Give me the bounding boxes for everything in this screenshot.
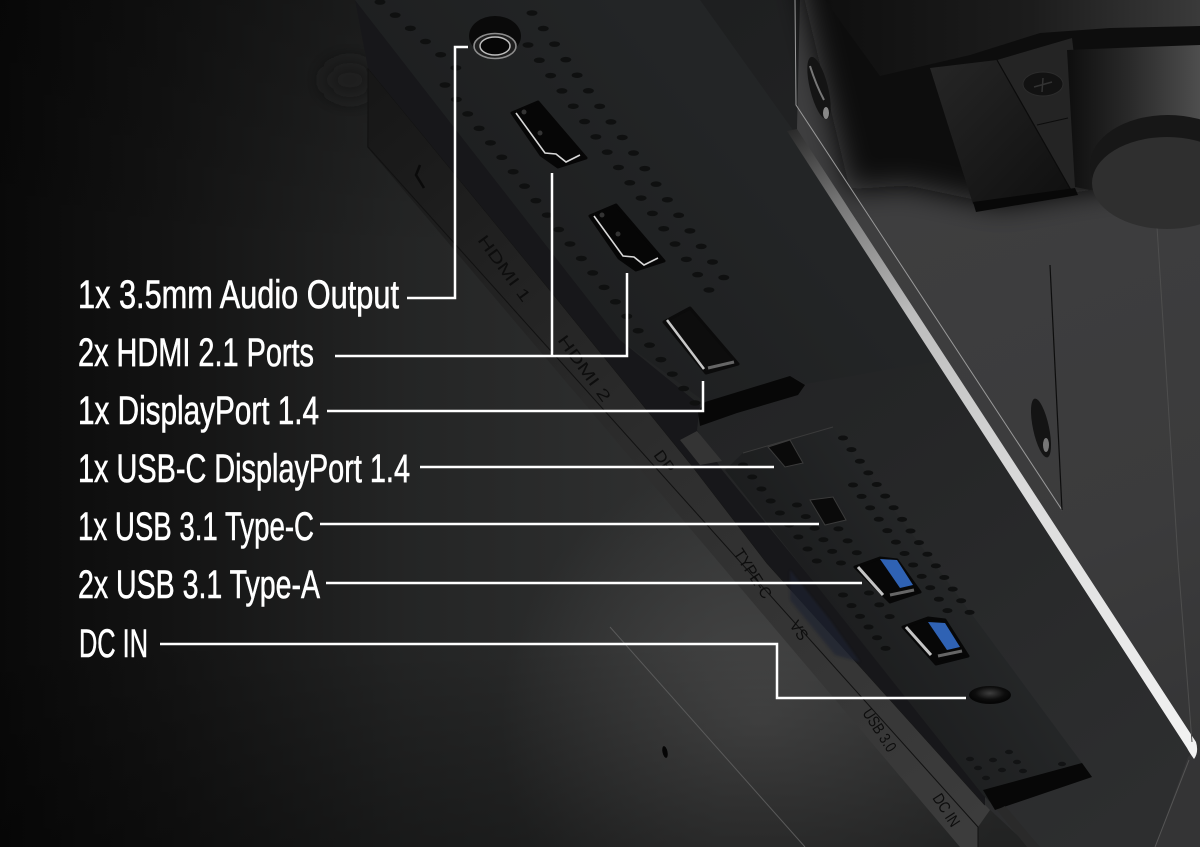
stand: bracket — [930, 38, 1090, 212]
label list: DC IN — [79, 622, 148, 666]
icon: DC IN socket — [969, 686, 1011, 704]
recessed channel under plates — [355, 0, 985, 805]
vents — [853, 485, 956, 622]
right surface — [797, 0, 1200, 847]
vents — [743, 465, 826, 573]
strip edges — [368, 68, 985, 847]
embossed port labels: DP — [650, 447, 678, 477]
plate top edge highlight — [743, 427, 833, 453]
panel: lower port plate — [725, 427, 1092, 810]
vents column A — [532, 13, 735, 293]
leader line: USB-C DisplayPort — [420, 466, 774, 468]
label list — [78, 273, 410, 666]
icon: screw top — [803, 55, 835, 121]
icon: bracket screw — [1023, 72, 1063, 96]
label list: 1x USB-C DisplayPort 1.4 — [78, 447, 410, 491]
leader line: audio — [407, 47, 468, 298]
icon: DisplayPort — [664, 308, 738, 373]
stand: cylinder — [1067, 45, 1200, 229]
leader line: DC IN — [160, 644, 966, 698]
embossed port labels — [474, 232, 963, 830]
embossed port labels: DC IN — [929, 791, 963, 830]
label list: 2x HDMI 2.1 Ports — [78, 331, 314, 375]
vents — [869, 593, 890, 617]
icon: audio jack — [469, 16, 521, 58]
label list: 1x USB 3.1 Type-C — [78, 505, 314, 549]
light notch — [680, 431, 722, 465]
bright diagonal edge — [787, 129, 1197, 759]
thin bezel line — [610, 627, 805, 847]
leader line: USB Type-C — [320, 523, 819, 525]
vents column C — [445, 85, 695, 403]
icon: screw lower — [1027, 397, 1055, 459]
icon: HDMI port 2 — [590, 205, 664, 270]
label list: 1x 3.5mm Audio Output — [78, 273, 399, 317]
icon: USB-A port 2 — [903, 618, 968, 664]
plate shadow — [983, 763, 1092, 810]
blue reflection — [790, 570, 860, 662]
stand: arm — [825, 0, 1200, 76]
embossed port labels: HDMI 1 — [474, 232, 533, 306]
leader line: HDMI — [335, 173, 627, 356]
main rear surface — [355, 0, 1193, 847]
small mark on strip — [416, 165, 424, 188]
faint reflection — [324, 62, 376, 98]
leader line: USB Type-A — [326, 582, 862, 584]
label strip along port bay — [367, 68, 990, 847]
leader line: DisplayPort — [327, 381, 703, 411]
label list: 1x DisplayPort 1.4 — [78, 389, 319, 433]
thin dark frame line — [1050, 265, 1062, 510]
vents top left — [380, 2, 456, 68]
small hole — [661, 746, 669, 758]
label list: 2x USB 3.1 Type-A — [78, 563, 320, 607]
vents — [820, 505, 857, 553]
vents column B — [528, 45, 709, 290]
lower edge wedge — [997, 806, 1040, 847]
panel: upper port plate — [355, 0, 945, 426]
dark diagonal groove — [680, 0, 790, 150]
embossed port labels: TYPE-C — [730, 546, 774, 602]
embossed port labels: HDMI 2 — [554, 332, 613, 406]
vents — [843, 595, 894, 659]
vents — [797, 505, 841, 563]
thin frame outline — [795, 0, 1062, 510]
icon: USB-A port 1 — [855, 558, 920, 602]
embossed port labels: USB 3.0 — [859, 706, 899, 755]
vents bottom — [966, 750, 1066, 780]
icon: USB-C port 2 — [810, 497, 846, 525]
icon: USB-C port 1 — [768, 440, 803, 467]
embossed port labels: VS — [786, 618, 811, 644]
shadow under stand — [795, 0, 1200, 205]
vents — [843, 438, 978, 624]
faint right line — [1155, 195, 1192, 742]
plate shadow — [698, 376, 805, 426]
lower corner edge — [1155, 760, 1189, 847]
icon: HDMI port 1 — [512, 102, 586, 167]
